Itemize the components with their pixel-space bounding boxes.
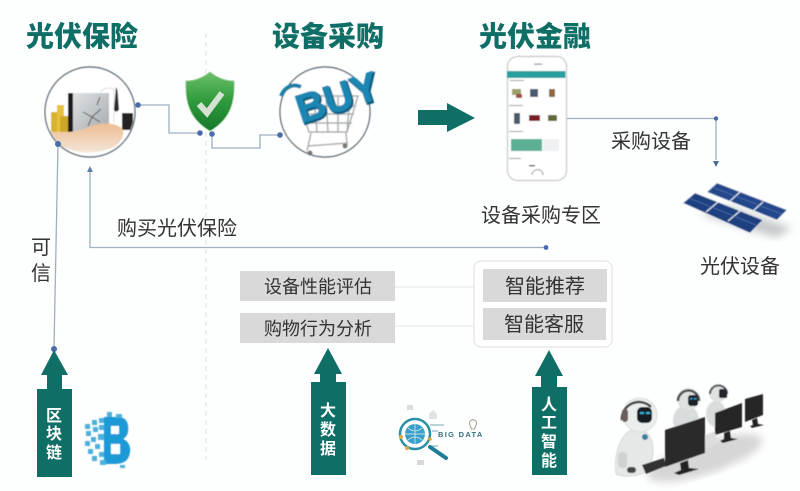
robot 3 bbox=[706, 384, 727, 427]
text: 可信: 可 bbox=[31, 237, 51, 259]
title: 设备采购: 设备采购 bbox=[272, 21, 384, 52]
arrow: 大数据: 数 bbox=[320, 421, 336, 439]
text: 设备采购专区: 设备采购专区 bbox=[481, 204, 601, 227]
box: 设备性能评估: 设备性能评估 bbox=[264, 277, 372, 297]
box: 智能客服: 智能客服 bbox=[504, 313, 584, 336]
arrow: green right bbox=[418, 103, 475, 132]
box: 智能推荐: 智能推荐 bbox=[505, 275, 585, 298]
arrow: 区块链: 块 bbox=[46, 425, 62, 443]
box: 购物行为分析 bbox=[240, 313, 395, 343]
connector: insurance to shield bbox=[135, 102, 203, 136]
arrow: 区块链 bbox=[37, 350, 72, 477]
icon: shopping cart circle: BUY bbox=[290, 64, 385, 132]
arrow: 人工智能: 能 bbox=[541, 451, 557, 470]
connector: blockchain to insurance bbox=[51, 141, 61, 352]
icon: shopping cart circle bbox=[280, 64, 386, 157]
arrow: 人工智能: 人 bbox=[541, 397, 557, 414]
icon: insurance circle bbox=[45, 67, 135, 157]
arrow: 区块链: 链 bbox=[46, 443, 62, 462]
connector: phone to solar panels bbox=[567, 116, 719, 167]
arrow: 区块链: 区 bbox=[46, 408, 62, 425]
icon: big data magnifier: BIG DATA bbox=[438, 430, 484, 439]
box: 购物行为分析: 购物行为分析 bbox=[264, 319, 372, 339]
text: 可信 bbox=[31, 237, 51, 285]
phone: equipment purchase app bbox=[507, 56, 566, 180]
arrow: purchase insurance loop bbox=[87, 166, 548, 250]
arrow: 人工智能: 工 bbox=[541, 415, 557, 432]
robot 1 bbox=[616, 398, 657, 476]
icon: blockchain B bbox=[85, 412, 130, 468]
connector: shield to cart bbox=[209, 131, 283, 148]
title: 光伏金融: 光伏金融 bbox=[479, 20, 591, 52]
illustration: robot customer service bbox=[616, 384, 767, 491]
panel: AI services bbox=[474, 261, 612, 347]
arrow: 人工智能 bbox=[532, 350, 567, 475]
icon: green shield bbox=[186, 72, 234, 131]
icon: shopping cart circle: BUY bbox=[292, 66, 386, 134]
arrow: 大数据: 据 bbox=[320, 440, 336, 458]
icon: solar panels bbox=[683, 183, 792, 238]
text: 光伏设备: 光伏设备 bbox=[700, 255, 780, 278]
icon: big data magnifier bbox=[399, 405, 484, 465]
text: 可信: 信 bbox=[31, 262, 51, 285]
arrow: 大数据 bbox=[311, 348, 346, 475]
text: 购买光伏保险: 购买光伏保险 bbox=[117, 217, 237, 240]
box: 设备性能评估 bbox=[240, 271, 395, 301]
text: 采购设备: 采购设备 bbox=[611, 130, 691, 153]
arrow: 人工智能: 智 bbox=[541, 432, 557, 451]
robot 2 bbox=[673, 388, 699, 437]
arrow: 大数据: 大 bbox=[320, 402, 336, 420]
title: 光伏保险: 光伏保险 bbox=[26, 20, 138, 52]
